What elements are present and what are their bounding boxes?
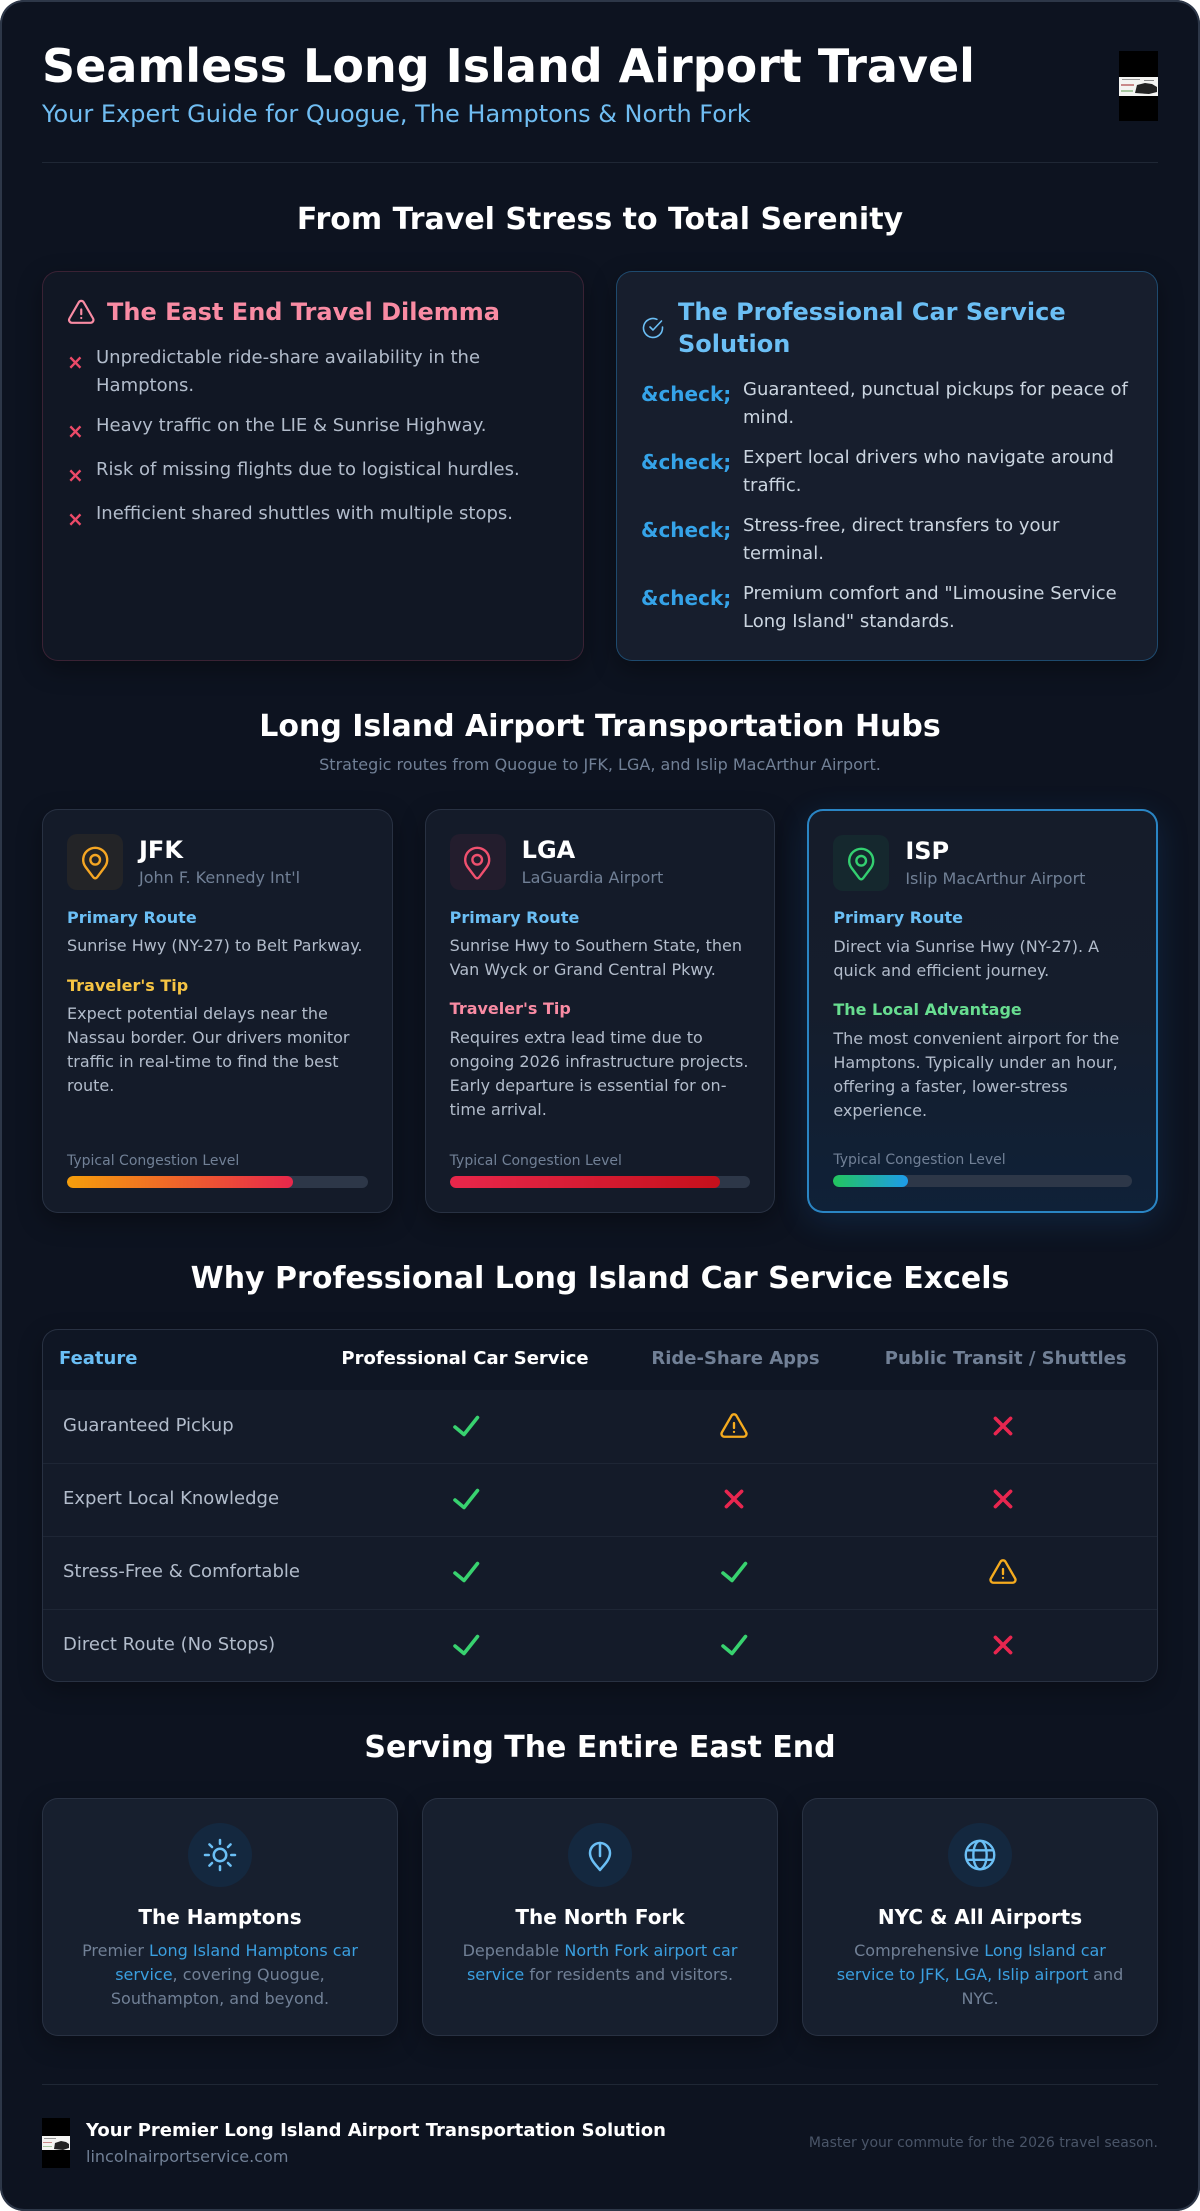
ISP advantage text: The most convenient airport for the (833, 1029, 1119, 1048)
LGA congestion bar (450, 1176, 750, 1188)
problem 1 (67, 347, 480, 396)
benefit 2: traffic. (743, 475, 802, 496)
header subtitle: Your Expert Guide for Quogue, The Hamptons & North Fork (42, 100, 751, 128)
problem 2 (67, 415, 487, 443)
benefit 2 (641, 447, 1114, 496)
JFK tip text (67, 1004, 350, 1095)
benefit 1 (641, 379, 1128, 428)
ISP route text (833, 937, 1099, 980)
LGA tip label: Traveler's Tip (450, 999, 571, 1018)
row: expert local knowledge (42, 1463, 1158, 1536)
problem 1: × (67, 350, 84, 374)
benefit 1: &check; (641, 382, 731, 406)
icon: JFK pin (67, 834, 123, 890)
column: feature: Feature (59, 1348, 137, 1369)
LGA tip text: time arrival. (450, 1100, 547, 1119)
icon: leaf pin (568, 1823, 632, 1887)
problem 4: × (67, 507, 84, 531)
JFK congestion label: Typical Congestion Level (67, 1153, 239, 1169)
LGA congestion label: Typical Congestion Level (450, 1153, 622, 1169)
dilemma heading: The East End Travel Dilemma (107, 298, 500, 326)
icon: check circle (642, 318, 664, 338)
ISP route text: quick and efficient journey. (833, 961, 1049, 980)
footer tagline: Your Premier Long Island Airport Transportation Solution (86, 2120, 666, 2141)
JFK tip text: Expect potential delays near the (67, 1004, 328, 1023)
ISP advantage text (833, 1029, 1119, 1120)
LGA tip text: ongoing 2026 infrastructure projects. (450, 1052, 748, 1071)
LGA tip text: Requires extra lead time due to (450, 1028, 703, 1047)
card: JFK (42, 809, 393, 1213)
solution heading: Solution (678, 330, 790, 358)
JFK route text: Sunrise Hwy (NY-27) to Belt Parkway. (67, 936, 362, 955)
benefit 4 (641, 583, 1117, 632)
icon: warning triangle (68, 300, 95, 324)
LGA tip text: Early departure is essential for on- (450, 1076, 726, 1095)
panel: professional car service solution (616, 271, 1158, 661)
row: guaranteed pickup (63, 1413, 1012, 1438)
section heading: east end: Serving The Entire East End (364, 1730, 836, 1765)
problem 2: × (67, 419, 84, 443)
footer note: Master your commute for the 2026 travel season. (809, 2135, 1158, 2151)
benefit 3: Stress-free, direct transfers to your (743, 515, 1059, 536)
NYC description: NYC. (961, 1989, 999, 2008)
LGA full name: LaGuardia Airport (522, 868, 663, 887)
LGA tip text (450, 1028, 748, 1119)
problem 2: Heavy traffic on the LIE & Sunrise Highway. (96, 415, 487, 436)
North Fork description (463, 1941, 738, 1984)
hubs subheading: Strategic routes from Quogue to JFK, LGA, and Islip MacArthur Airport. (319, 755, 881, 774)
header title: Seamless Long Island Airport Travel (42, 39, 975, 93)
icon: sun (188, 1823, 252, 1887)
ISP congestion label: Typical Congestion Level (833, 1152, 1006, 1168)
benefit 4: Premium comfort and "Limousine Service (743, 583, 1117, 604)
panel: east end travel dilemma (42, 271, 584, 661)
ISP route text: Direct via Sunrise Hwy (NY-27). A (833, 937, 1099, 956)
footer logo (42, 2118, 70, 2168)
table header row (42, 1329, 1158, 1390)
column: professional car service: Professional Car Service (341, 1348, 589, 1369)
section heading: comparison: Why Professional Long Island Car Service Excels (191, 1261, 1009, 1296)
benefit 1: mind. (743, 407, 794, 428)
NYC title: NYC & All Airports (878, 1905, 1082, 1929)
benefit 4: &check; (641, 586, 731, 610)
problem 1: Hamptons. (96, 375, 194, 396)
benefit 3 (641, 515, 1060, 564)
benefit 2: Expert local drivers who navigate around (743, 447, 1114, 468)
LGA route text (450, 936, 742, 979)
benefit 3: &check; (641, 518, 731, 542)
Hamptons description (82, 1941, 358, 2008)
NYC description: Comprehensive Long Island car (854, 1941, 1106, 1960)
row: guaranteed pickup: Guaranteed Pickup (63, 1415, 234, 1436)
icon: globe (948, 1823, 1012, 1887)
icon: LGA pin (450, 834, 506, 890)
LGA route label: Primary Route (450, 908, 579, 927)
ISP full name: Islip MacArthur Airport (905, 869, 1085, 888)
header logo (1119, 51, 1158, 121)
ISP advantage text: Hamptons. Typically under an hour, (833, 1053, 1118, 1072)
benefit 1: Guaranteed, punctual pickups for peace of (743, 379, 1128, 400)
LGA route text: Sunrise Hwy to Southern State, then (450, 936, 742, 955)
problem 4: Inefficient shared shuttles with multiple stops. (96, 503, 513, 524)
JFK tip text: traffic in real-time to find the best (67, 1052, 339, 1071)
North Fork description: service for residents and visitors. (467, 1965, 733, 1984)
section heading: hubs: Long Island Airport Transportation Hubs (259, 709, 941, 744)
ISP advantage text: offering a faster, lower-stress (833, 1077, 1068, 1096)
benefit 4: Long Island" standards. (743, 611, 955, 632)
ISP route label: Primary Route (833, 908, 963, 927)
row: expert local knowledge: Expert Local Knowledge (63, 1488, 279, 1509)
Hamptons description: service, covering Quogue, (115, 1965, 325, 1984)
solution heading (678, 298, 1066, 358)
problem 1: Unpredictable ride-share availability in the (96, 347, 480, 368)
NYC description (837, 1941, 1123, 2008)
card: ISP highlighted (807, 809, 1158, 1213)
row: direct route: Direct Route (No Stops) (63, 1634, 275, 1655)
ISP advantage label: The Local Advantage (833, 1000, 1022, 1019)
row: stress-free and comfortable: Stress-Free & Comfortable (63, 1561, 300, 1582)
column: public transit: Public Transit / Shuttles (885, 1348, 1127, 1369)
Hamptons description: Southampton, and beyond. (111, 1989, 329, 2008)
column: ride-share: Ride-Share Apps (651, 1348, 820, 1369)
JFK code: JFK (139, 836, 183, 864)
North Fork title: The North Fork (515, 1905, 685, 1929)
benefit 2: &check; (641, 450, 731, 474)
JFK tip text: Nassau border. Our drivers monitor (67, 1028, 350, 1047)
solution heading: The Professional Car Service (678, 298, 1066, 326)
benefit 3: terminal. (743, 543, 824, 564)
ISP advantage text: experience. (833, 1101, 927, 1120)
NYC description: service to JFK, LGA, Islip airport and (837, 1965, 1123, 1984)
section heading: stress to serenity: From Travel Stress to Total Serenity (297, 202, 903, 237)
footer website: lincolnairportservice.com (86, 2147, 288, 2166)
JFK full name: John F. Kennedy Int'l (139, 868, 300, 887)
LGA route text: Van Wyck or Grand Central Pkwy. (450, 960, 716, 979)
JFK route label: Primary Route (67, 908, 197, 927)
ISP code: ISP (905, 837, 949, 865)
JFK tip text: route. (67, 1076, 114, 1095)
problem 3: Risk of missing flights due to logistical hurdles. (96, 459, 520, 480)
comparison table (42, 1329, 1158, 1682)
JFK congestion bar (67, 1176, 368, 1188)
JFK tip label: Traveler's Tip (67, 976, 188, 995)
LGA code: LGA (522, 836, 575, 864)
card: NYC and all airports (802, 1798, 1158, 2036)
Hamptons description: Premier Long Island Hamptons car (82, 1941, 358, 1960)
card: LGA (425, 809, 775, 1213)
ISP congestion bar (833, 1175, 1132, 1187)
icon: ISP pin (833, 835, 889, 891)
card: The North Fork (422, 1798, 778, 2036)
Hamptons title: The Hamptons (138, 1905, 302, 1929)
North Fork description: Dependable North Fork airport car (463, 1941, 737, 1960)
card: The Hamptons (42, 1798, 398, 2036)
row: stress-free and comfortable (42, 1536, 1158, 1609)
row: direct route (42, 1609, 1158, 1682)
problem 3: × (67, 463, 84, 487)
